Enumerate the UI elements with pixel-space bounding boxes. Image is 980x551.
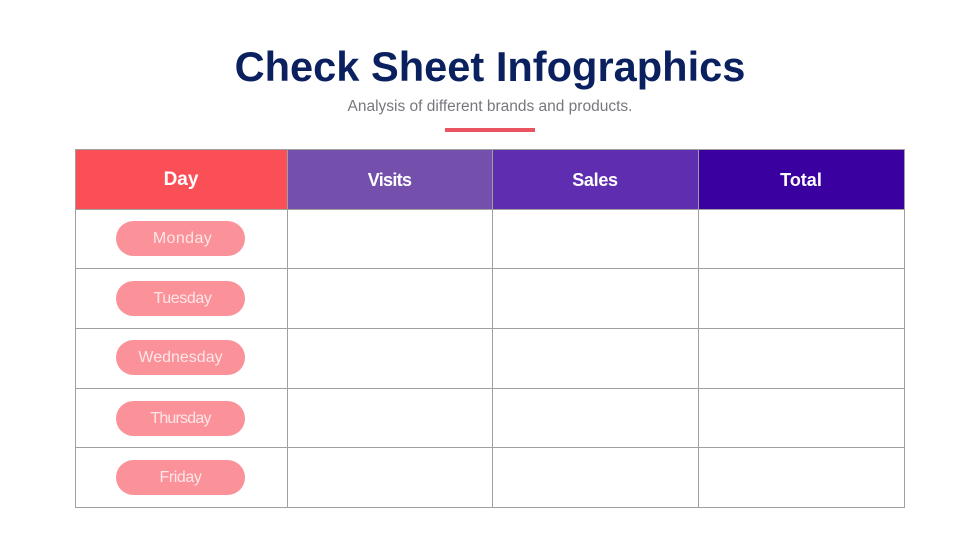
day pill: Monday: Monday — [153, 230, 212, 247]
day pill: Thursday — [116, 401, 245, 436]
header cell: Day — [75, 149, 287, 209]
day pill: Friday: Friday — [159, 469, 202, 486]
header label: Day: Day — [164, 169, 198, 190]
day pill: Wednesday: Wednesday — [138, 349, 223, 366]
day pill: Tuesday: Tuesday — [154, 290, 211, 307]
day pill: Friday — [116, 460, 245, 495]
header label: Visits: Visits — [368, 170, 411, 190]
subtitle: Analysis of different brands and products. — [348, 98, 632, 115]
header label: Total: Total — [780, 170, 822, 190]
day pill: Thursday: Thursday — [150, 410, 211, 427]
header cell: Visits — [287, 149, 493, 209]
header label: Sales: Sales — [572, 170, 618, 190]
day pill: Monday — [116, 221, 245, 256]
day pill: Tuesday — [116, 281, 245, 316]
title: Check Sheet Infographics — [235, 43, 745, 90]
header cell: Sales — [493, 149, 699, 209]
accent rule — [445, 128, 535, 132]
day pill: Wednesday — [116, 340, 245, 375]
header cell: Total — [699, 149, 905, 209]
